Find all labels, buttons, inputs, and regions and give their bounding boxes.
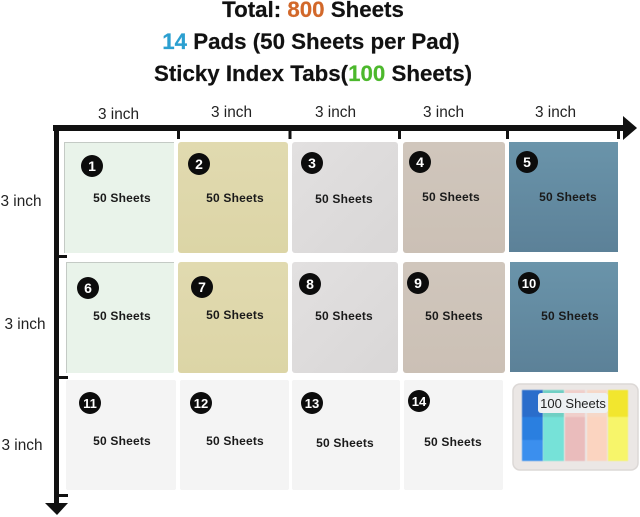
panel: pad 14 xyxy=(404,380,503,490)
horizontal dimension labels: 3 inch xyxy=(211,104,252,121)
tab: peach xyxy=(587,390,607,461)
panel: pad 7: 50 Sheets xyxy=(206,308,264,322)
panel: pad 7: 7 xyxy=(198,279,206,295)
tab: aqua xyxy=(543,390,564,461)
panel: pad 1 xyxy=(64,142,174,253)
panel: pad 2: 50 Sheets xyxy=(206,191,264,205)
vertical dimension labels: 3 inch xyxy=(0,193,42,210)
panel: pad 2: 2 xyxy=(195,156,203,172)
panel: pad 6 xyxy=(66,262,174,373)
panel: pad 6: 50 Sheets xyxy=(93,309,151,323)
panel: pad 6: 6 xyxy=(84,280,92,296)
panel: pad 11 xyxy=(66,380,176,490)
panel: pad 7 xyxy=(178,262,288,373)
label: 100 sheets: 100 Sheets xyxy=(540,396,606,411)
panel: pad 12: 12 xyxy=(194,396,208,411)
panel: pad 9 xyxy=(403,262,505,373)
panel: pad 5: 50 Sheets xyxy=(539,190,597,204)
panel: pad 10: 10 xyxy=(522,276,536,291)
tab: pink xyxy=(565,390,585,461)
panel: pad 4: 50 Sheets xyxy=(422,190,480,204)
panel: pad 1: 1 xyxy=(88,158,96,174)
vertical dimension labels: 3 inch xyxy=(2,437,42,454)
panel: pad 5 xyxy=(509,142,618,252)
panel: pad 9: 9 xyxy=(414,275,422,291)
panel: pad 13 xyxy=(292,380,400,490)
title: sticky index tabs: Sticky Index Tabs(100 Sheets) xyxy=(154,61,472,86)
panel: pad 1: 50 Sheets xyxy=(93,191,151,205)
panel: pad 8: 50 Sheets xyxy=(315,309,373,323)
panel: pad 5: 5 xyxy=(523,154,531,170)
panel: sticky index tabs case xyxy=(513,384,638,470)
panel: pad 3: 3 xyxy=(308,155,316,171)
panel: pad 3 xyxy=(292,142,398,253)
horizontal dimension labels: 3 inch xyxy=(423,104,464,121)
panel: pad 10: 50 Sheets xyxy=(541,309,599,323)
vertical dimension labels: 3 inch xyxy=(4,316,46,333)
arrow: vertical axis xyxy=(45,125,68,515)
horizontal dimension labels: 3 inch xyxy=(535,104,576,121)
horizontal dimension labels xyxy=(98,104,576,123)
panel: pad 14: 50 Sheets xyxy=(424,435,482,449)
tab: yellow xyxy=(608,390,628,461)
arrow: horizontal axis xyxy=(53,116,637,140)
panel: pad 12 xyxy=(180,380,289,490)
title: pads count: 14 Pads (50 Sheets per Pad) xyxy=(162,29,460,54)
panel: pad 9: 50 Sheets xyxy=(425,309,483,323)
panel: pad 4 xyxy=(403,142,505,253)
panel: pad 4: 4 xyxy=(416,154,424,170)
vertical dimension labels xyxy=(0,193,46,454)
panel: pad 13: 50 Sheets xyxy=(316,436,374,450)
panel: pad 11: 50 Sheets xyxy=(93,434,151,448)
tab: blue xyxy=(522,390,543,461)
panel: pad 8: 8 xyxy=(306,276,314,292)
panel: pad 10 xyxy=(510,262,618,372)
horizontal dimension labels: 3 inch xyxy=(315,104,356,121)
panel: pad 2 xyxy=(178,142,288,253)
horizontal dimension labels: 3 inch xyxy=(98,106,139,123)
panel: pad 3: 50 Sheets xyxy=(315,192,373,206)
panel: pad 13: 13 xyxy=(305,396,319,411)
panel: pad 12: 50 Sheets xyxy=(206,434,264,448)
panel: pad 14: 14 xyxy=(412,394,427,409)
panel: pad 8 xyxy=(292,262,398,373)
panel: pad 11: 11 xyxy=(83,396,97,411)
